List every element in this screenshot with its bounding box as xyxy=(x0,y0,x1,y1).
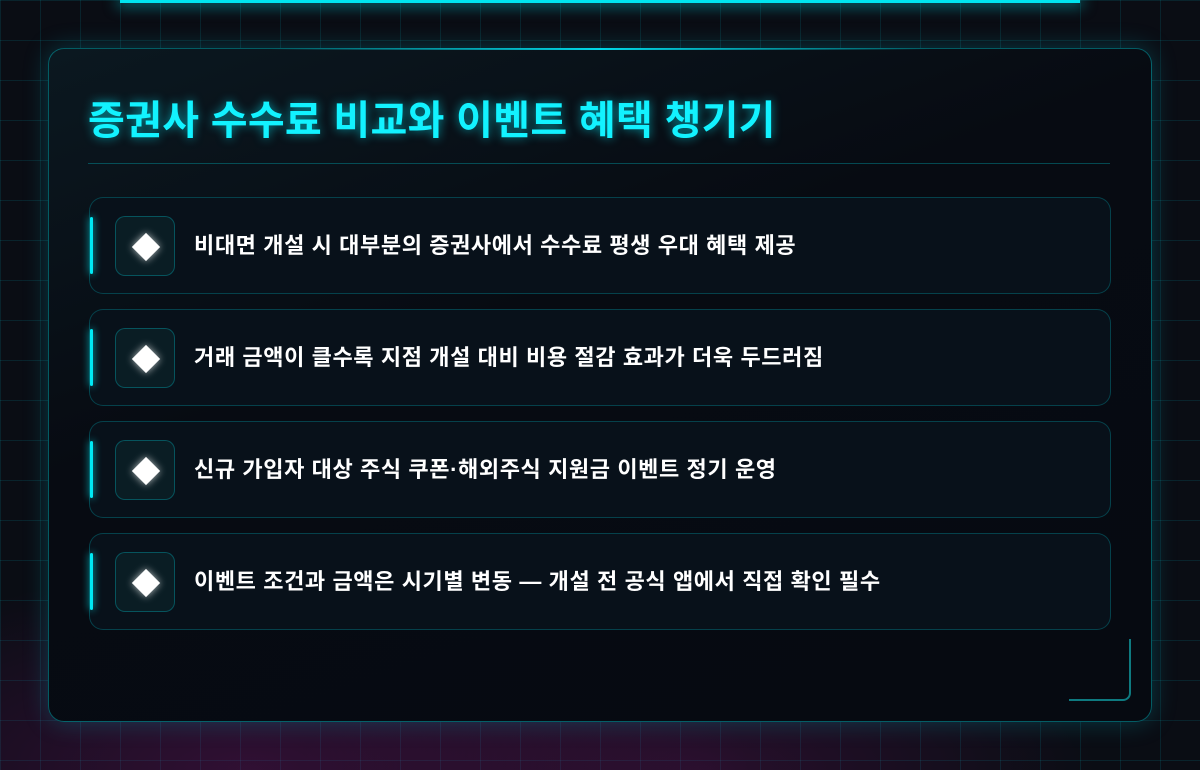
text: 비대면 개설 시 대부분의 증권사에서 수수료 평생 우대 혜택 제공 xyxy=(194,233,796,258)
icon: diamond xyxy=(115,440,175,500)
text: 이벤트 조건과 금액은 시기별 변동 — 개설 전 공식 앱에서 직접 확인 필수 xyxy=(194,569,881,594)
text: 신규 가입자 대상 주식 쿠폰·해외주식 지원금 이벤트 정기 운영 xyxy=(194,457,777,482)
icon: diamond xyxy=(115,552,175,612)
icon: diamond xyxy=(115,328,175,388)
item 3 xyxy=(89,421,1111,518)
corner bracket xyxy=(1069,639,1131,701)
item 4 xyxy=(89,533,1111,630)
title: 증권사 수수료 비교와 이벤트 혜택 챙기기 xyxy=(88,99,776,143)
icon: diamond xyxy=(115,216,175,276)
item 2 xyxy=(89,309,1111,406)
item 1 xyxy=(89,197,1111,294)
text: 거래 금액이 클수록 지점 개설 대비 비용 절감 효과가 더욱 두드러짐 xyxy=(194,345,824,370)
